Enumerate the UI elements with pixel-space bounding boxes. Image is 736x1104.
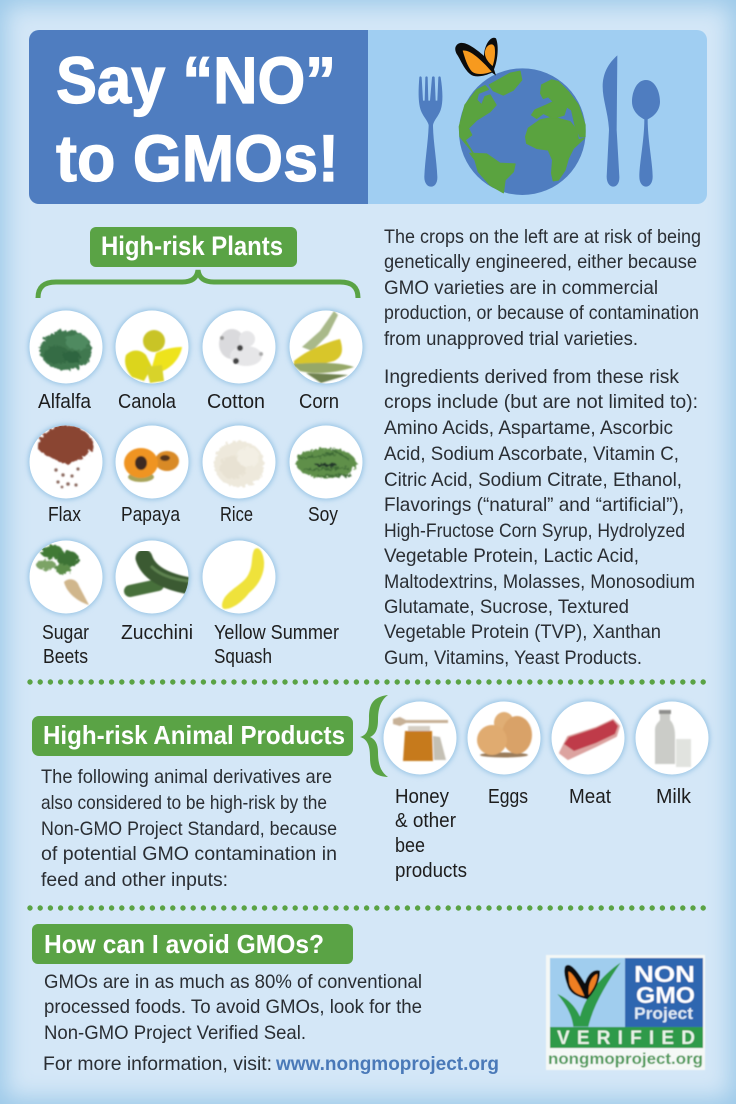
animal product: honey: & other	[395, 810, 456, 832]
ingredients text block: Amino Acids, Aspartame, Ascorbic	[384, 417, 673, 439]
ingredients text block: Gum, Vitamins, Yeast Products.	[384, 647, 642, 669]
animal products text block	[41, 766, 337, 891]
plant: alfalfa	[28, 310, 104, 413]
title: to GMOs!	[56, 121, 339, 195]
icon: butterfly	[455, 38, 498, 76]
ingredients text block: Glutamate, Sucrose, Textured	[384, 596, 629, 618]
plant: rice	[202, 424, 276, 526]
ingredients text block: Flavorings (“natural” and “artificial”),	[384, 494, 684, 516]
animal product: meat: Meat	[569, 786, 611, 808]
header banner	[29, 30, 707, 204]
ingredients text block: Maltodextrins, Molasses, Monosodium	[384, 571, 695, 593]
avoid GMOs text block: GMOs are in as much as 80% of conventional	[44, 971, 422, 993]
plant: yellow summer squash: Squash	[214, 646, 272, 668]
Non-GMO Project Verified seal: VERIFIED	[557, 1028, 695, 1049]
plant: zucchini: Zucchini	[121, 622, 193, 644]
more information line: www.nongmoproject.org	[275, 1053, 499, 1075]
plant: zucchini	[114, 540, 193, 644]
divider	[30, 679, 707, 685]
plant: cotton: Cotton	[207, 391, 265, 413]
Non-GMO Project Verified seal: GMO	[636, 982, 695, 1008]
Non-GMO Project Verified seal	[546, 955, 705, 1070]
animal product: milk	[634, 700, 710, 808]
icon: fork	[419, 76, 442, 187]
title: Say “NO”	[56, 43, 336, 117]
ingredients text block: Vegetable Protein, Lactic Acid,	[384, 545, 639, 567]
plant: soy: Soy	[308, 504, 338, 526]
animal products text block: feed and other inputs:	[41, 869, 228, 891]
avoid GMOs text block: Non-GMO Project Verified Seal.	[44, 1022, 306, 1044]
plant: rice: Rice	[220, 504, 253, 526]
plant: papaya	[114, 424, 190, 526]
animal product: honey	[382, 700, 467, 882]
icon: globe	[459, 68, 586, 195]
plant: flax	[28, 424, 104, 526]
plant: corn: Corn	[299, 391, 339, 413]
more information line	[43, 1053, 499, 1075]
plant: canola	[114, 310, 190, 413]
animal products text block: Non-GMO Project Standard, because	[41, 818, 337, 840]
Non-GMO Project Verified seal: NON	[634, 961, 695, 987]
plant: sugar beets: Beets	[43, 646, 88, 668]
ingredients text block: Ingredients derived from these risk	[384, 366, 679, 388]
animal product: eggs: Eggs	[488, 786, 528, 808]
icon: spoon	[632, 80, 660, 187]
plant: sugar beets: Sugar	[42, 622, 89, 644]
animal products text block: The following animal derivatives are	[41, 766, 332, 788]
Non-GMO Project Verified seal: Project	[634, 1004, 693, 1023]
ingredients text block: crops include (but are not limited to):	[384, 391, 698, 413]
ingredients text block: Acid, Sodium Ascorbate, Vitamin C,	[384, 443, 679, 465]
animal products text block: of potential GMO contamination in	[41, 843, 337, 865]
animal product: honey: Honey	[395, 786, 449, 808]
intro text block: The crops on the left are at risk of being	[384, 226, 701, 248]
plant: corn	[288, 310, 364, 413]
heading tag: How can I avoid GMOs?	[32, 924, 353, 964]
plant: alfalfa: Alfalfa	[38, 391, 92, 413]
title panel	[29, 30, 368, 204]
icon: knife	[603, 55, 619, 187]
brace: animal products	[360, 695, 388, 777]
animal product: honey: products	[395, 860, 467, 882]
intro text block: GMO varieties are in commercial	[384, 277, 658, 299]
intro text block: production, or because of contamination	[384, 302, 699, 324]
avoid GMOs text block	[44, 971, 422, 1044]
ingredients text block: Vegetable Protein (TVP), Xanthan	[384, 621, 661, 643]
more information line: For more information, visit:	[43, 1053, 272, 1075]
animal product: eggs	[466, 700, 542, 808]
Non-GMO Project Verified seal: nongmoproject.org	[548, 1051, 703, 1068]
animal product: milk: Milk	[656, 786, 692, 808]
plant: papaya: Papaya	[121, 504, 181, 526]
heading tag: How can I avoid GMOs?: How can I avoid GMOs?	[44, 929, 324, 959]
plant: sugar beets	[28, 540, 104, 668]
plant: cotton	[202, 310, 276, 413]
ingredients text block	[384, 366, 698, 669]
animal product: honey: bee	[395, 835, 425, 857]
ingredients text block: Citric Acid, Sodium Citrate, Ethanol,	[384, 469, 682, 491]
heading tag: High-risk Animal Products: High-risk Animal Products	[43, 720, 345, 750]
heading tag: High-risk Plants	[90, 227, 297, 267]
plant: yellow summer squash: Yellow Summer	[214, 622, 339, 644]
avoid GMOs text block: processed foods. To avoid GMOs, look for the	[44, 996, 422, 1018]
heading tag: High-risk Plants: High-risk Plants	[101, 231, 283, 261]
intro text block: genetically engineered, either because	[384, 251, 697, 273]
intro text block	[384, 226, 701, 350]
title	[56, 56, 334, 182]
intro text block: from unapproved trial varieties.	[384, 328, 638, 350]
plant: flax: Flax	[48, 504, 81, 526]
plant: soy	[288, 424, 364, 526]
animal product: meat	[550, 700, 626, 808]
brace: plants	[38, 270, 358, 298]
animal products text block: also considered to be high-risk by the	[41, 792, 327, 814]
heading tag: High-risk Animal Products	[32, 716, 353, 756]
seal icon: sprout and butterfly	[557, 963, 621, 1027]
plant: yellow summer squash	[202, 540, 339, 668]
ingredients text block: High-Fructose Corn Syrup, Hydrolyzed	[384, 520, 685, 542]
illustration panel: globe on a place setting	[368, 30, 707, 204]
plant: canola: Canola	[118, 391, 177, 413]
divider	[30, 905, 707, 911]
